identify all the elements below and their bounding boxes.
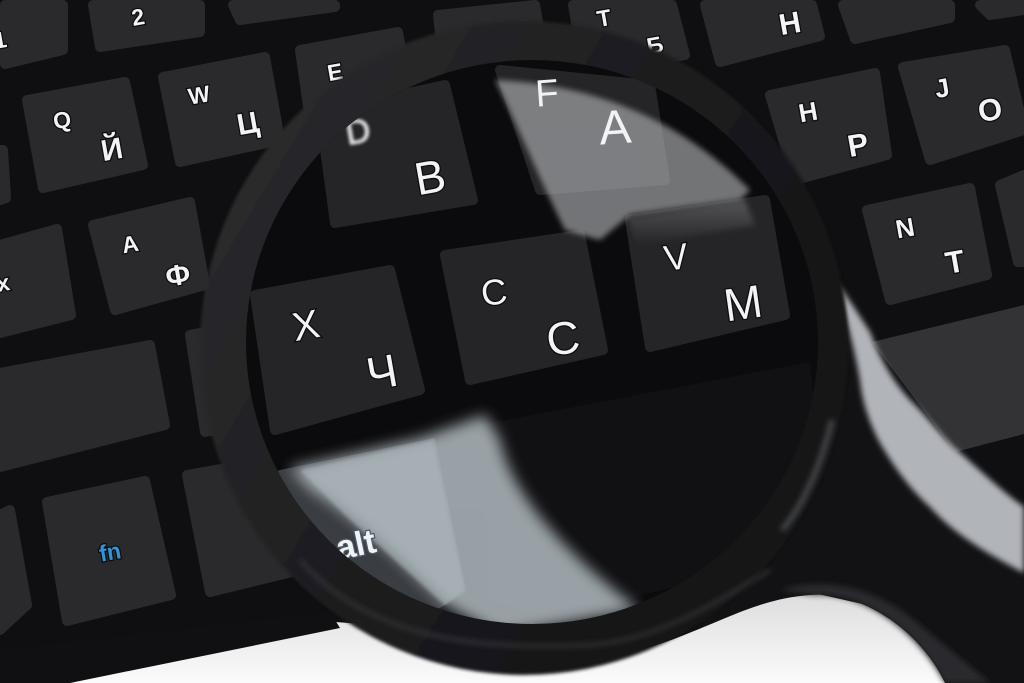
outer key legends: O <box>975 91 1005 129</box>
outer key legends: Б <box>645 31 665 59</box>
top glare <box>495 80 750 240</box>
outer key legends: T <box>943 243 967 281</box>
keyboard lower edge <box>0 612 340 683</box>
rim bottom highlight <box>300 560 770 646</box>
outer key legends: Ф <box>163 258 193 294</box>
lens key legends: M <box>720 275 766 331</box>
rim right inner highlight <box>782 420 832 530</box>
outer key legends: 2 <box>129 3 147 31</box>
outer key legends: E <box>325 58 345 86</box>
handle of the magnifier <box>600 300 1024 683</box>
lens key legends: V <box>661 235 691 279</box>
outer key legends: H <box>796 96 820 128</box>
lens key legends: F <box>534 72 560 116</box>
alt key glare <box>300 440 465 605</box>
lens key legends: X <box>289 302 323 350</box>
outer key legends: Ц <box>234 106 262 142</box>
lens view <box>240 55 830 635</box>
lens key legends: B <box>410 149 450 205</box>
lens key legends <box>289 72 766 568</box>
outer key legends: A <box>120 230 140 258</box>
outer key legends: H <box>776 6 804 42</box>
outer key legends: Й <box>98 131 125 168</box>
magnified keys <box>250 70 830 620</box>
lens key legends: A <box>597 100 633 156</box>
lens key legends: C <box>543 310 583 366</box>
outer key legends: J <box>932 72 952 104</box>
bottom glare <box>290 415 640 635</box>
white desk surface <box>60 590 1024 683</box>
lens key legends: D <box>343 111 373 153</box>
magnifier rim <box>200 21 848 675</box>
outer key legends: T <box>595 4 613 32</box>
outer key legends: P <box>845 126 871 164</box>
outer key legends: Q <box>51 106 73 134</box>
outer key legends: N <box>893 212 917 244</box>
lens key legends: C <box>478 270 510 314</box>
handle lower edge shading <box>780 584 990 683</box>
glare on V key <box>628 199 754 238</box>
lens key legends: alt <box>333 522 379 568</box>
outer key legends: W <box>186 80 212 110</box>
lens key legends: Ч <box>362 344 402 400</box>
outer key legends: fn <box>97 537 123 567</box>
handle highlight band <box>836 282 1024 573</box>
